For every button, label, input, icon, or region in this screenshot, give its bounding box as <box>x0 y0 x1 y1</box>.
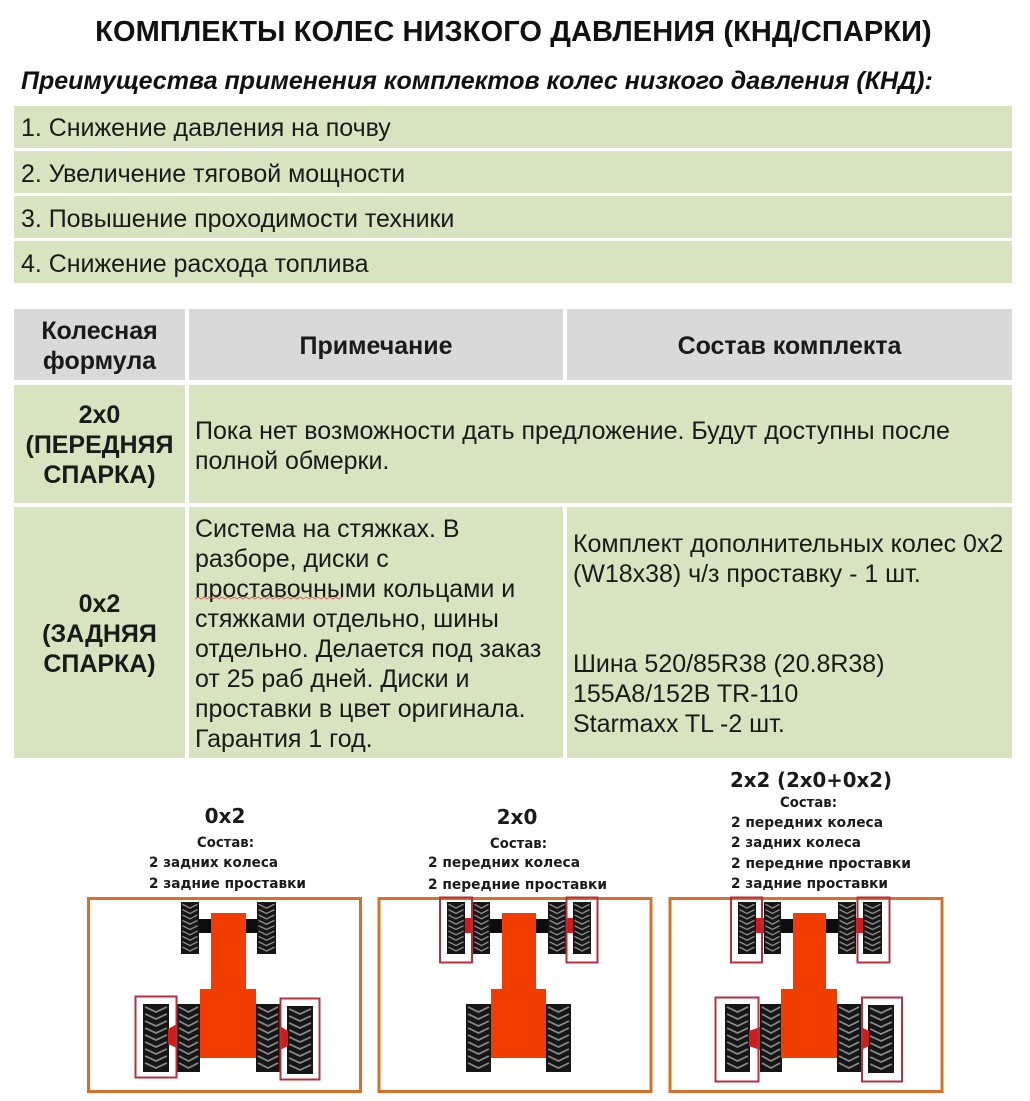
kit contents: 0x2: Starmaxx TL -2 шт. <box>573 710 785 738</box>
row label: 0x2: (ЗАДНЯЯ <box>42 620 157 648</box>
row note: 2x0 <box>189 385 1012 503</box>
benefit 4: 4. Снижение расхода топлива <box>21 250 368 278</box>
row label: 2x0: 2x0 <box>79 401 120 429</box>
composition: 0x2 <box>149 835 306 892</box>
benefit 1: 1. Снижение давления на почву <box>21 114 391 142</box>
composition: 2x2: 2 передние проставки <box>731 856 911 872</box>
diagram: 0x2 <box>88 804 360 1092</box>
row note: 0x2: отдельно. Делается под заказ <box>195 635 541 663</box>
composition: 0x2: 2 задние проставки <box>149 876 306 892</box>
row label: 0x2: 0x2 <box>79 590 120 618</box>
header: note <box>189 309 563 380</box>
header: wheel formula: Колесная <box>41 316 158 344</box>
row note: 0x2: проставки в цвет оригинала. <box>195 695 526 723</box>
kit contents: 0x2: 155A8/152B TR-110 <box>573 680 798 708</box>
benefit 3 <box>14 196 1012 238</box>
composition: 2x0 <box>428 836 607 893</box>
composition: 0x2: 2 задних колеса <box>149 855 278 871</box>
composition: 2x0: 2 передние проставки <box>428 877 607 893</box>
row note: 0x2 <box>189 507 563 758</box>
benefit 1 <box>14 106 1012 148</box>
benefit 4 <box>14 241 1012 283</box>
header: wheel formula <box>14 309 185 380</box>
frame <box>379 898 651 1092</box>
tractor <box>447 902 591 1072</box>
header: kit contents: Состав комплекта <box>678 332 901 360</box>
subtitle: Преимущества применения комплектов колес низкого давления (КНД): <box>21 67 933 95</box>
title: КОМПЛЕКТЫ КОЛЕС НИЗКОГО ДАВЛЕНИЯ (КНД/СПАРКИ) <box>95 16 932 48</box>
highlight: rear spacers <box>136 996 320 1080</box>
table <box>14 309 1012 758</box>
kit contents: 0x2 <box>567 507 1012 758</box>
row note: 0x2: Система на стяжках. В <box>195 515 460 543</box>
row note: 0x2: Гарантия 1 год. <box>195 725 373 753</box>
row note: 2x0: Пока нет возможности дать предложение. Будут доступны после <box>195 417 950 445</box>
row note: 0x2: от 25 раб дней. Диски и <box>195 665 469 693</box>
composition: 2x0: 2 передних колеса <box>428 855 580 871</box>
tractor <box>143 902 313 1074</box>
composition: 2x2: 2 задних колеса <box>731 835 861 851</box>
diagram: 2x2 <box>670 768 942 1092</box>
header: kit contents <box>567 309 1012 380</box>
kit contents: 0x2: (W18x38) ч/з проставку - 1 шт. <box>573 560 921 588</box>
highlight: all spacers <box>716 898 902 1082</box>
heading: 2x2: 2x2 (2x0+0x2) <box>730 768 892 792</box>
composition: 0x2: Состав: <box>197 835 254 851</box>
composition: 2x2: Состав: <box>780 795 837 811</box>
frame <box>670 898 942 1092</box>
kit contents: 0x2: Комплект дополнительных колес 0x2 <box>573 530 1003 558</box>
highlight: front spacers <box>440 898 598 962</box>
benefit 2 <box>14 151 1012 193</box>
row note: 0x2: проставочными кольцами и <box>195 575 515 603</box>
benefit list <box>14 106 1012 283</box>
row note: 2x0: полной обмерки. <box>195 447 389 475</box>
heading: 0x2: 0x2 <box>205 804 245 828</box>
row label: 0x2: СПАРКА) <box>43 650 156 678</box>
row label: 2x0: (ПЕРЕДНЯЯ <box>26 431 173 459</box>
row note: 0x2: разборе, диски с <box>195 545 389 573</box>
row label: 0x2 <box>14 507 185 758</box>
row label: 2x0 <box>14 385 185 503</box>
benefit 2: 2. Увеличение тяговой мощности <box>21 160 405 188</box>
header: wheel formula: формула <box>43 346 156 374</box>
row label: 2x0: СПАРКА) <box>43 461 156 489</box>
row note: 0x2: стяжками отдельно, шины <box>195 605 499 633</box>
tractor diagrams <box>87 768 944 1093</box>
header: note: Примечание <box>300 332 452 360</box>
composition: 2x2: 2 передних колеса <box>731 815 883 831</box>
kit contents: 0x2: Шина 520/85R38 (20.8R38) <box>573 650 884 678</box>
composition: 2x2 <box>731 795 911 892</box>
composition: 2x2: 2 задние проставки <box>731 876 888 892</box>
tractor <box>725 902 894 1073</box>
composition: 2x0: Состав: <box>490 836 547 852</box>
heading: 2x0: 2x0 <box>497 805 537 829</box>
diagram: 2x0 <box>379 805 651 1092</box>
frame <box>88 898 360 1092</box>
benefit 3: 3. Повышение проходимости техники <box>21 205 454 233</box>
